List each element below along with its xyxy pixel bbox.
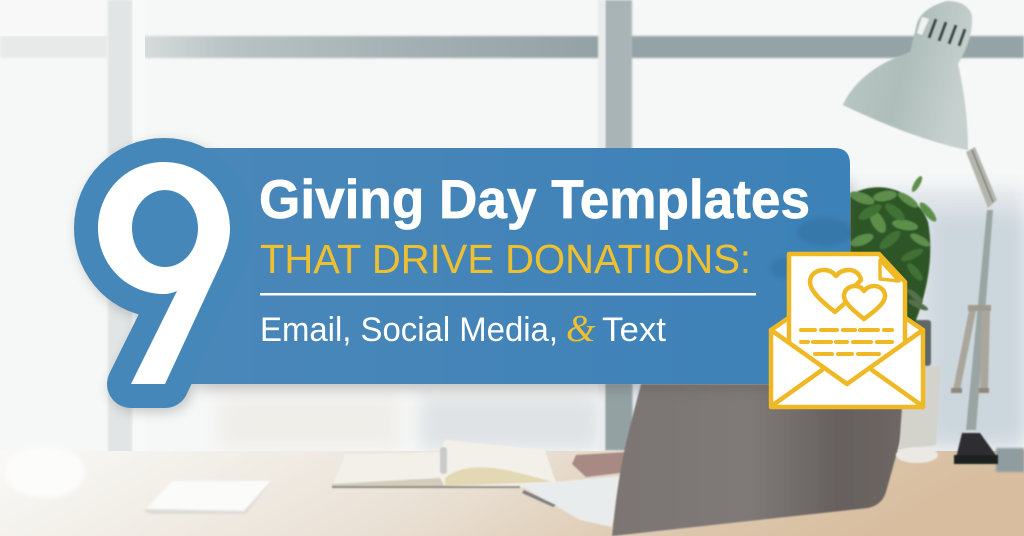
icon: letter fold corner bbox=[880, 260, 899, 281]
subheading: That drive donations: THAT DRIVE DONATIONS: bbox=[260, 236, 751, 282]
banner shadow bbox=[101, 166, 850, 390]
laptop lid bbox=[612, 384, 916, 536]
pink book bbox=[572, 452, 628, 477]
blue title banner bbox=[190, 148, 850, 384]
icon: envelope front bbox=[771, 330, 923, 407]
tagline: channels: & bbox=[566, 308, 596, 350]
divider rule bbox=[260, 293, 756, 296]
big number 9 bbox=[98, 162, 230, 384]
icon: envelope seams bbox=[773, 370, 921, 405]
laptop keyboard base bbox=[520, 476, 620, 527]
photo background: desk bbox=[0, 446, 1024, 536]
icon: large heart bbox=[810, 270, 861, 312]
icon: small heart bbox=[844, 286, 885, 319]
plant bbox=[848, 175, 939, 330]
icon: letter paper bbox=[789, 254, 905, 384]
icon: envelope with love letter bbox=[771, 254, 923, 407]
tablet on desk bbox=[144, 481, 271, 514]
icon: letter text lines bbox=[801, 330, 892, 354]
tagline: channels: Text bbox=[602, 311, 667, 349]
plant pot and saucer bbox=[896, 320, 941, 463]
icon: envelope back flaps bbox=[771, 317, 923, 384]
desk lamp bbox=[843, 1, 998, 464]
heading: Giving Day Templates: Giving Day Templates bbox=[259, 168, 810, 230]
tagline: channels: Email, Social Media, bbox=[260, 311, 558, 349]
faint plant seen through banner bbox=[771, 218, 853, 278]
open notebook with pen bbox=[332, 440, 560, 488]
